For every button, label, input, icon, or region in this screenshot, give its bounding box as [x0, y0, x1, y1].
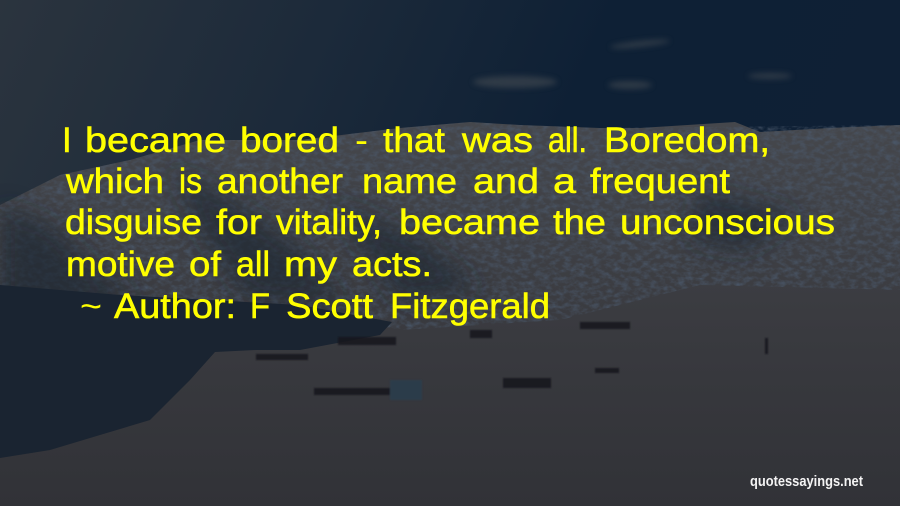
quote text	[62, 121, 835, 326]
quote line 3: vitality,	[276, 203, 382, 242]
village buildings	[256, 322, 768, 400]
quote line 2: a	[553, 162, 577, 201]
quote line 3: became	[399, 203, 540, 242]
quote line 4: all	[236, 245, 270, 284]
quote line 3: disguise	[65, 203, 202, 242]
author line	[80, 287, 550, 326]
quote line 2	[65, 162, 730, 201]
quote line 3: the	[553, 203, 606, 242]
quote line 3: for	[216, 203, 262, 242]
quote line 3: unconscious	[620, 203, 835, 242]
quote line 4: my	[284, 245, 338, 284]
quote line 4: acts.	[352, 245, 432, 284]
author line: Scott	[286, 287, 373, 326]
quote line 4: motive	[66, 245, 175, 284]
background: snowy mountains	[0, 122, 900, 506]
author line: Author:	[114, 287, 236, 326]
author line: ~	[80, 287, 102, 326]
author line: F	[250, 287, 270, 326]
clouds	[473, 38, 792, 89]
quote line 1	[62, 121, 770, 160]
quote line 2: and	[473, 162, 539, 201]
quote line 1: that	[383, 121, 445, 160]
quote line 2: name	[362, 162, 457, 201]
dark forest slope	[0, 285, 392, 458]
quote line 2: which	[65, 162, 164, 201]
quote line 2: frequent	[590, 162, 730, 201]
quote line 4: of	[189, 245, 221, 284]
quote line 2: another	[217, 162, 343, 201]
quote line 3	[65, 203, 835, 242]
author line: Fitzgerald	[390, 287, 550, 326]
quote line 1: all.	[548, 121, 587, 160]
watermark: quotessayings.net: quotessayings.net	[750, 473, 863, 490]
quote line 1: I	[62, 121, 72, 160]
quote line 1: -	[355, 121, 368, 160]
quote line 4	[66, 245, 432, 284]
quote line 1: became	[85, 121, 226, 160]
dark mountain ridges	[0, 165, 800, 320]
mountain rock texture	[0, 120, 900, 330]
quote line 1: bored	[240, 121, 339, 160]
quote line 1: was	[461, 121, 533, 160]
quote line 2: is	[179, 162, 202, 201]
quote line 1: Boredom,	[604, 121, 770, 160]
